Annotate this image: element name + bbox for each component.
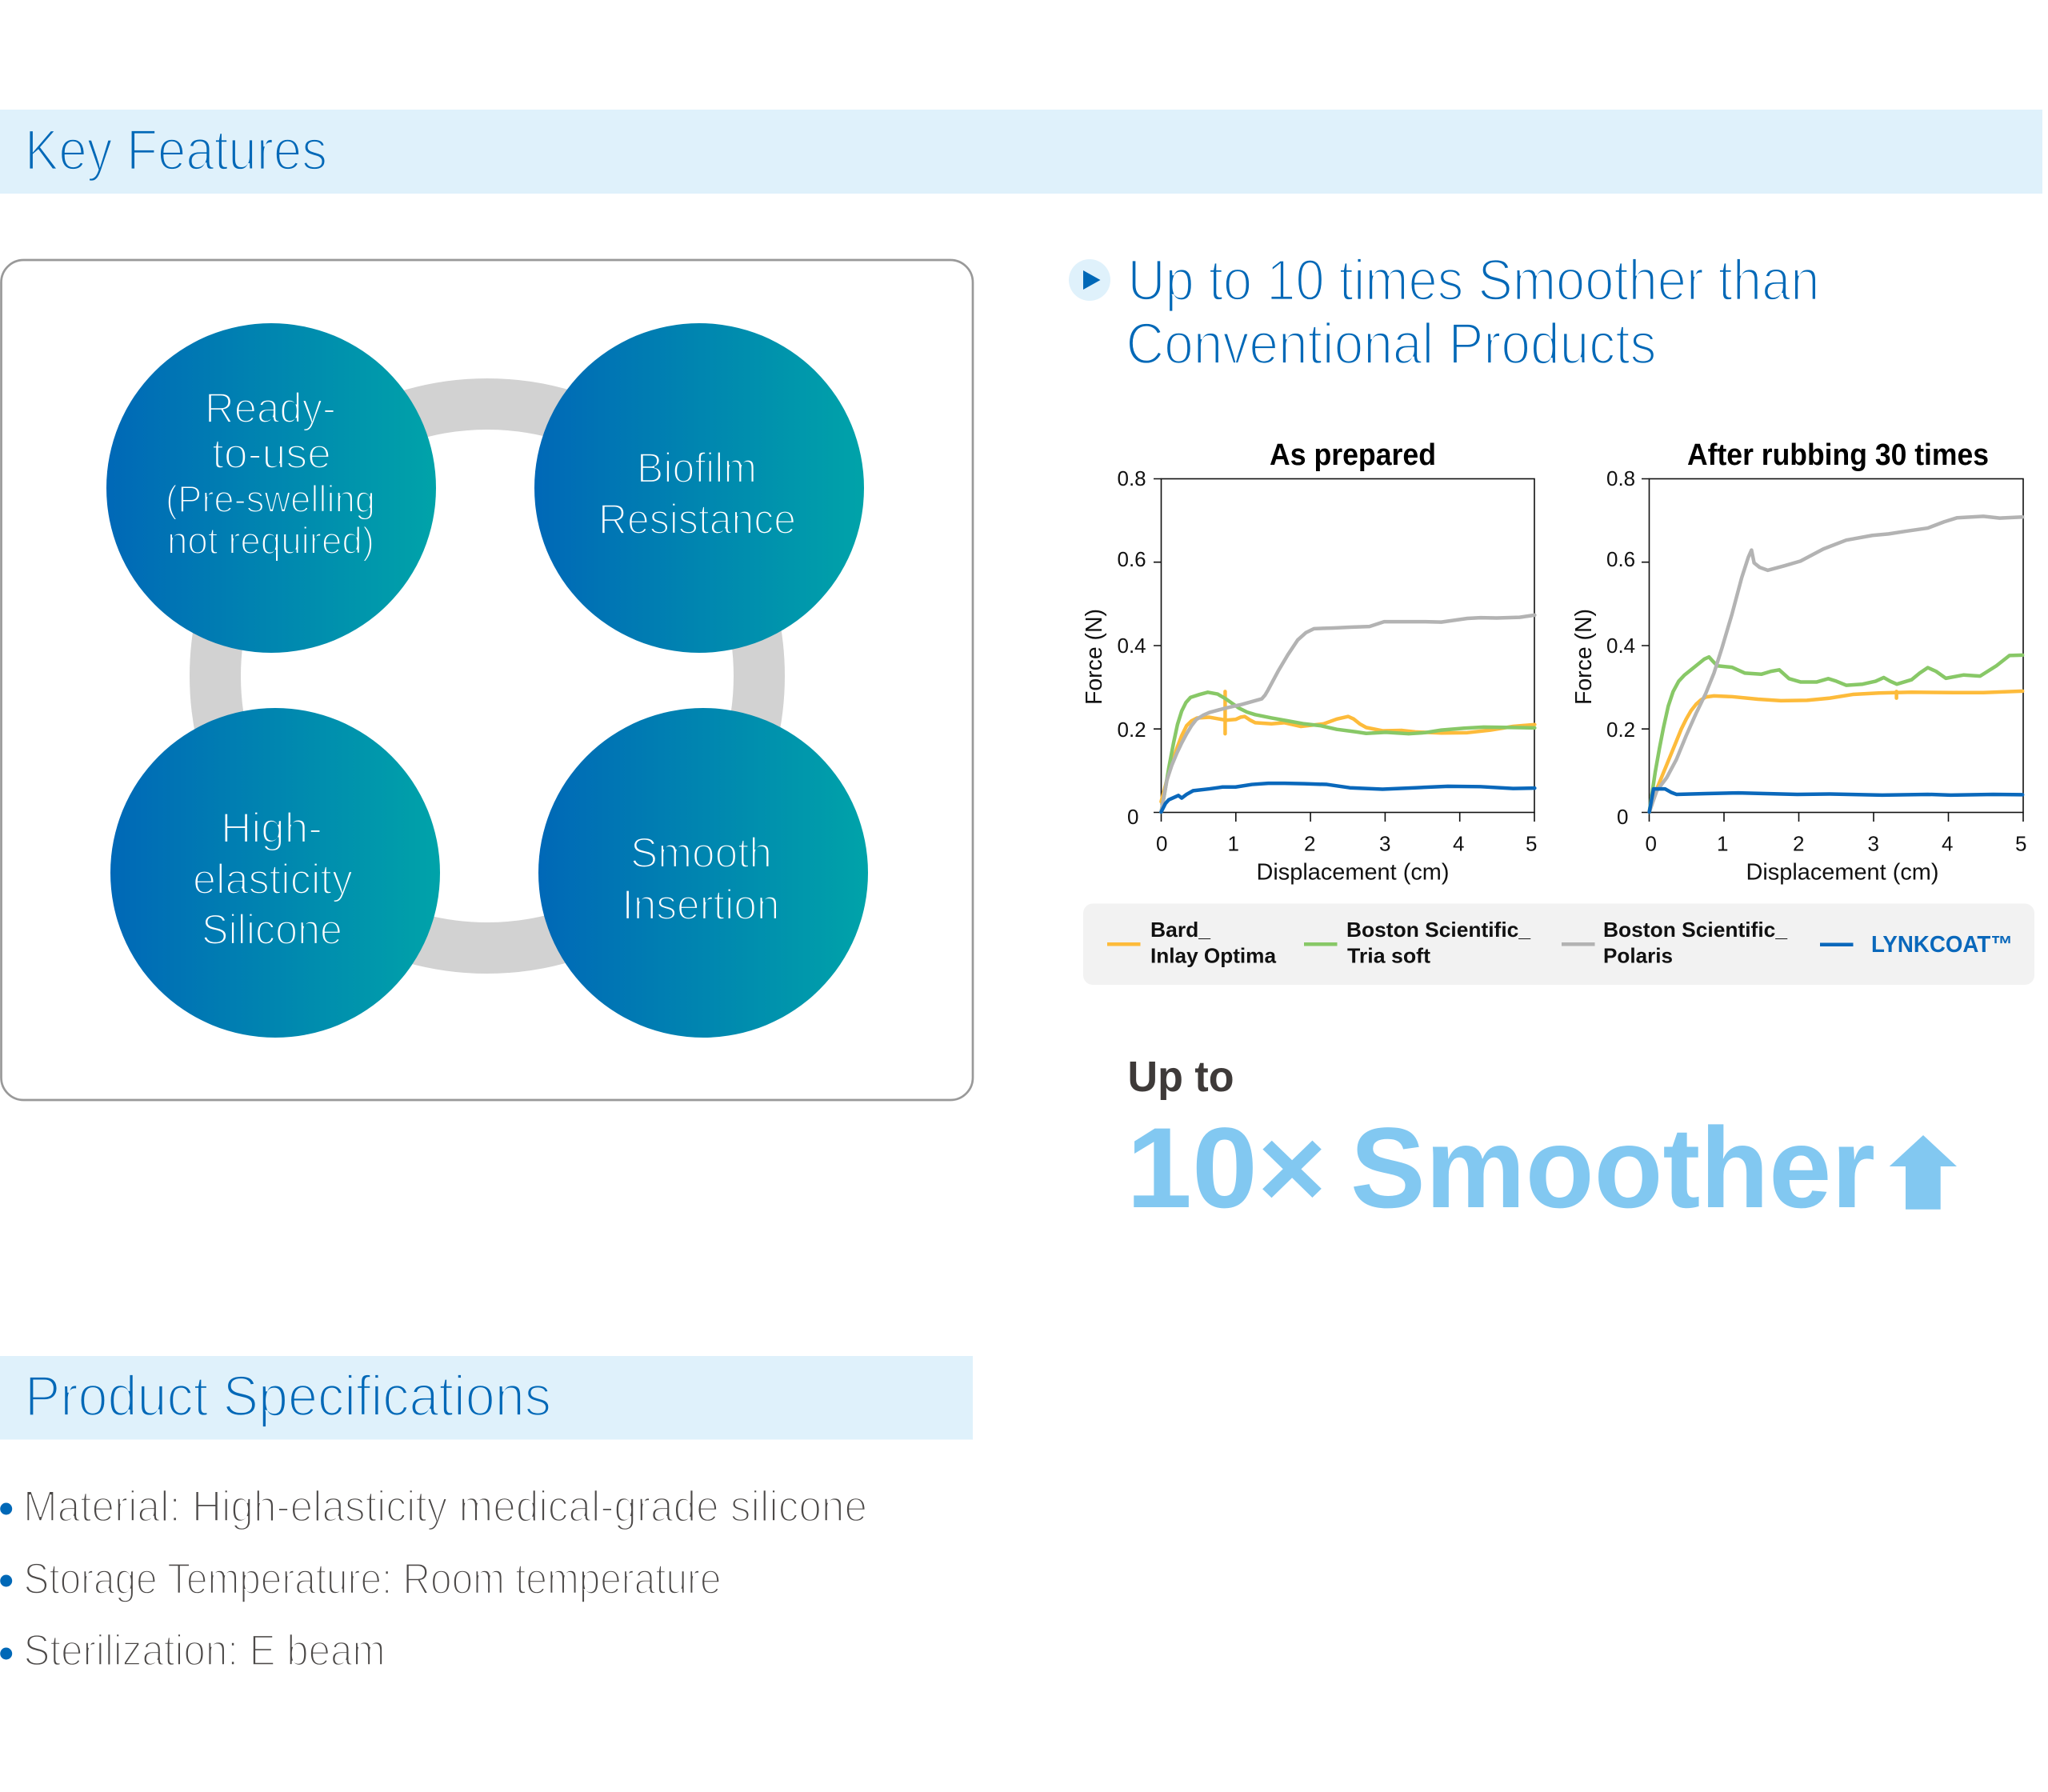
- tick labels: [1606, 466, 2026, 856]
- circle: Ready-to-use: Ready-: [205, 385, 336, 432]
- chart: After rubbing 30 times: Force (N): [1571, 609, 1597, 705]
- spec: material: Material: High-elasticity medical-grade silicone: [23, 1482, 867, 1531]
- icon: play bullet: [1069, 259, 1110, 301]
- legend item: Boston Scientific Polaris: Polaris: [1603, 944, 1673, 968]
- tick labels: 5: [2015, 832, 2026, 856]
- panel: key feature circles: [2, 260, 973, 1100]
- tick labels: 3: [1379, 832, 1390, 856]
- circle: Ready-to-use: to-use: [212, 430, 331, 478]
- callout: up to 10x smoother: [1126, 1053, 1957, 1232]
- legend: [1083, 904, 2034, 985]
- legend item: LYNKCOAT: LYNKCOAT™: [1871, 932, 2013, 958]
- tick labels: 4: [1942, 832, 1953, 856]
- curves: [1650, 516, 2022, 812]
- circle: High-elasticity Silicone: elasticity: [193, 856, 353, 903]
- legend item: Bard Inlay Optima: Bard_: [1150, 918, 1211, 942]
- legend item: Boston Scientific Tria soft: Boston Scientific_: [1346, 918, 1531, 942]
- chart title: As prepared: [1270, 438, 1436, 472]
- heading: smoother than conventional: [1126, 249, 1819, 376]
- tick labels: [1117, 466, 1537, 856]
- circle: High-elasticity Silicone: Silicone: [202, 906, 342, 954]
- axes: [1154, 478, 1534, 822]
- tick labels: 4: [1453, 832, 1464, 856]
- tick labels: 3: [1867, 832, 1879, 856]
- chart title: After rubbing 30 times: [1687, 438, 1989, 472]
- callout lead-in: Up to: [1128, 1053, 1234, 1101]
- icon: up arrow: [1890, 1135, 1957, 1210]
- legend item: Bard Inlay Optima: Inlay Optima: [1150, 944, 1277, 968]
- axes: [1642, 478, 2023, 822]
- chart: As prepared: [1082, 438, 1537, 885]
- tick labels: 5: [1526, 832, 1537, 856]
- axis labels: Displacement (cm): [1746, 859, 1939, 885]
- heading: smoother than conventional: Conventional Products: [1126, 312, 1656, 376]
- legend item: Boston Scientific Tria soft: Tria soft: [1347, 944, 1430, 968]
- section header: Product Specifications: Product Specifications: [25, 1365, 551, 1429]
- legend item: Boston Scientific Tria soft: [1304, 918, 1531, 968]
- spec: storage temperature: Storage Temperature: Room temperature: [24, 1554, 722, 1603]
- legend item: Boston Scientific Polaris: Boston Scientific_: [1603, 918, 1788, 942]
- tick labels: 1: [1717, 832, 1728, 856]
- circle: Smooth Insertion: Insertion: [622, 882, 779, 929]
- callout value: Smoother: Smoother: [1350, 1105, 1875, 1232]
- callout value: 10x: 10×: [1126, 1105, 1326, 1232]
- tick labels: 0.4: [1117, 634, 1146, 658]
- legend item: Bard Inlay Optima: [1107, 918, 1277, 968]
- chart: After rubbing 30 times: [1571, 438, 2026, 885]
- circle: High-elasticity Silicone: High-: [221, 805, 322, 852]
- circle: High-elasticity Silicone: [110, 708, 440, 1038]
- heading: smoother than conventional: Up to 10 times Smoother than: [1128, 249, 1819, 313]
- section header: Product Specifications: [0, 1356, 973, 1440]
- circle: Ready-to-use: [106, 323, 436, 653]
- section header: Key Features: [0, 110, 2042, 194]
- circle: Smooth Insertion: Smooth: [630, 830, 772, 877]
- tick labels: 0: [1645, 832, 1657, 856]
- tick labels: 2: [1304, 832, 1315, 856]
- tick labels: 0.8: [1606, 466, 1635, 490]
- tick labels: 0: [1617, 805, 1628, 829]
- tick labels: 0.2: [1606, 718, 1635, 742]
- circle: Ready-to-use: (Pre-swelling: [166, 478, 375, 520]
- section header: Key Features: Key Features: [25, 119, 327, 182]
- chart: As prepared: Force (N): [1082, 609, 1107, 705]
- tick labels: 0: [1127, 805, 1138, 829]
- circle: Biofilm Resistance: Resistance: [598, 496, 796, 543]
- tick labels: 0.6: [1117, 547, 1146, 571]
- tick labels: 0.2: [1117, 718, 1146, 742]
- circle: Biofilm Resistance: Biofilm: [637, 445, 757, 492]
- tick labels: 1: [1227, 832, 1239, 856]
- specifications list: [0, 1482, 867, 1675]
- grey connecting ring: [215, 404, 759, 948]
- circle: Biofilm Resistance: [534, 323, 864, 653]
- circle: Smooth Insertion: [538, 708, 868, 1038]
- legend item: Boston Scientific Polaris: [1562, 918, 1788, 968]
- tick labels: 2: [1793, 832, 1804, 856]
- tick labels: 0.6: [1606, 547, 1635, 571]
- axis labels: Displacement (cm): [1256, 859, 1450, 885]
- circle: Ready-to-use: not required): [167, 519, 374, 562]
- tick labels: 0: [1156, 832, 1167, 856]
- tick labels: 0.4: [1606, 634, 1635, 658]
- spec: sterilization: Sterilization: E beam: [24, 1626, 386, 1675]
- curves: [1161, 615, 1534, 812]
- tick labels: 0.8: [1117, 466, 1146, 490]
